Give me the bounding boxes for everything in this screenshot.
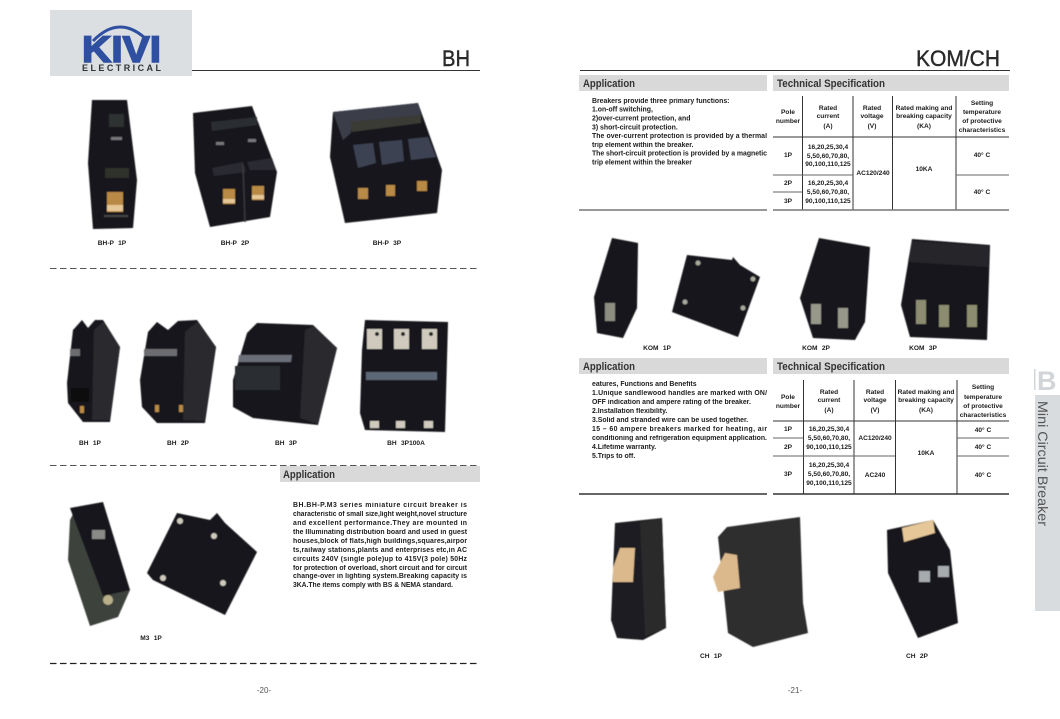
panel: CH technical specification: Rated making and <box>898 389 954 396</box>
caption: BH 3P100A: BH 3P100A <box>387 440 425 447</box>
panel: KOM application: 3) short-circuit protection. <box>592 124 678 132</box>
panel: KOM technical specification: number <box>776 118 801 125</box>
panel: KOM technical specification: (V) <box>868 123 876 130</box>
panel: KOM technical specification: Technical Specification <box>777 78 885 90</box>
panel: KOM application: The over-current protection is provided by a thermal <box>592 133 767 140</box>
panel: KOM technical specification: AC120/240 <box>856 170 890 177</box>
product: BH-P 1P <box>88 100 137 229</box>
panel: BH application: 3KA.The items comply with BS & NEMA standard. <box>293 582 453 589</box>
panel: CH technical specification: 40° C <box>975 443 992 451</box>
side tab: Mini Circuit Breaker: B <box>1037 366 1056 396</box>
panel: BH application: circuits 240V (single pole)up to 415V(3 pole) 50Hz <box>293 556 468 563</box>
panel: KOM technical specification <box>773 75 1009 210</box>
panel: KOM/CH application: 3.Solid and stranded wire can be used together. <box>592 417 748 424</box>
panel: KOM technical specification: 10KA <box>916 166 933 173</box>
panel: CH technical specification <box>773 358 1009 494</box>
caption: M3 1P: M3 1P <box>140 635 162 642</box>
product: CH 1P side <box>713 517 808 647</box>
panel: CH technical specification: voltage <box>863 397 887 404</box>
side tab: Mini Circuit Breaker: Mini Circuit Breaker <box>1035 401 1051 526</box>
panel: KOM technical specification: Rated <box>863 105 881 112</box>
panel: KOM technical specification: 5,50,60,70,80, <box>807 153 849 160</box>
panel: KOM application: Application <box>583 78 635 90</box>
logo: KIVI Electrical: KIVI <box>82 29 161 70</box>
panel: CH technical specification: Setting <box>972 384 994 391</box>
panel: CH technical specification: (A) <box>824 407 834 414</box>
panel: CH technical specification: of protective <box>963 403 1003 410</box>
panel: KOM/CH application: 2.Installation flexibility. <box>592 408 667 415</box>
panel: KOM technical specification: 2P <box>784 180 793 187</box>
panel: BH application: BH.BH-P.M3 series miniature circuit breaker is <box>293 502 467 509</box>
panel: KOM/CH application: OFF indication and ampere rating of the breaker. <box>592 399 751 406</box>
logo: KIVI Electrical: ELECTRICAL <box>82 63 162 73</box>
side tab: Mini Circuit Breaker <box>1034 366 1060 611</box>
panel: BH application: Application <box>283 469 335 481</box>
panel: CH technical specification: Technical Specification <box>777 361 885 373</box>
panel: CH technical specification: Rated <box>820 389 838 396</box>
panel: CH technical specification: (KA) <box>919 407 933 414</box>
panel: CH technical specification: 3P <box>784 471 793 478</box>
panel: BH application: the Illuminating distribution board and used in guest <box>293 529 468 536</box>
panel: BH application <box>280 466 480 589</box>
panel: KOM technical specification: Pole <box>781 109 795 116</box>
panel: KOM/CH application: 15 – 60 ampere breakers marked for heating, air <box>592 426 767 433</box>
panel: KOM technical specification: 16,20,25,30,4 <box>808 144 848 151</box>
panel: CH technical specification: (V) <box>871 407 879 414</box>
panel: CH technical specification: breaking capacity <box>898 397 954 404</box>
panel: CH technical specification: 90,100,110,125 <box>806 480 852 487</box>
panel: CH technical specification: 40° C <box>975 426 992 434</box>
product: BH 2P <box>140 320 216 423</box>
panel: KOM technical specification: 90,100,110,125 <box>805 198 851 205</box>
product: CH 1P front <box>611 518 666 640</box>
caption: KOM 3P: KOM 3P <box>909 345 937 352</box>
panel: KOM technical specification: 5,50,60,70,80, <box>807 189 849 196</box>
panel: CH technical specification: characteristics <box>960 412 1007 419</box>
panel: CH technical specification: Pole <box>781 394 795 401</box>
panel: KOM technical specification: 1P <box>784 152 793 159</box>
panel: CH technical specification: 1P <box>784 426 793 433</box>
caption: BH 3P: BH 3P <box>275 440 298 447</box>
panel: CH technical specification: temperature <box>964 394 1002 401</box>
product: BH-P 2P <box>193 106 277 227</box>
panel: KOM/CH application: eatures, Functions and Benefits <box>592 381 697 388</box>
panel: KOM technical specification: voltage <box>860 113 884 120</box>
panel: KOM application: Breakers provide three primary functions: <box>592 98 729 105</box>
panel: KOM technical specification: (KA) <box>917 123 931 130</box>
panel: CH technical specification: AC120/240 <box>858 435 892 442</box>
panel: KOM application: trip element within the breaker. <box>592 142 694 149</box>
panel: BH application: for protection of overload, short circuit and for circuit <box>293 565 468 572</box>
panel: KOM application: 2)over-current protection, and <box>592 116 690 122</box>
product: CH 2P <box>887 520 958 638</box>
panel: KOM technical specification: 16,20,25,30,4 <box>808 180 848 187</box>
caption: BH-P 1P: BH-P 1P <box>98 240 127 247</box>
panel: KOM application <box>579 75 767 210</box>
panel: KOM technical specification: temperature <box>963 109 1001 116</box>
product: KOM 2P <box>800 238 870 340</box>
panel: KOM technical specification: Rated <box>819 105 837 112</box>
panel: CH technical specification: Rated <box>866 389 884 396</box>
page number: 21: -21- <box>788 686 802 695</box>
panel: KOM/CH application: 4.Lifetime warranty. <box>592 444 656 451</box>
panel: KOM application: The short-circuit protection is provided by a magnetic <box>592 150 767 158</box>
panel: CH technical specification: number <box>776 403 801 410</box>
product: BH-P 3P <box>330 103 442 223</box>
panel: BH application: and excellent performance.They are mounted in <box>293 520 467 527</box>
panel: CH technical specification: 10KA <box>918 450 935 457</box>
panel: KOM technical specification: 90,100,110,125 <box>805 161 851 168</box>
panel: KOM technical specification: current <box>817 113 840 120</box>
panel: KOM technical specification: characteristics <box>959 127 1006 134</box>
panel: KOM technical specification: Rated making and <box>896 105 952 112</box>
logo: KIVI Electrical <box>50 10 192 76</box>
product: BH 1P <box>67 320 120 422</box>
panel: KOM/CH application: Application <box>583 361 635 373</box>
panel: CH technical specification: current <box>818 397 841 404</box>
caption: BH-P 3P: BH-P 3P <box>373 240 402 247</box>
panel: KOM application: trip element within the breaker <box>592 160 692 166</box>
caption: KOM 2P: KOM 2P <box>802 345 830 352</box>
panel: CH technical specification: 5,50,60,70,80, <box>808 471 850 478</box>
product: M3 1P <box>68 502 257 626</box>
panel: KOM technical specification: (A) <box>823 123 833 130</box>
caption: BH 2P: BH 2P <box>167 440 190 447</box>
caption: CH 1P: CH 1P <box>700 653 723 660</box>
panel: KOM technical specification: of protective <box>962 118 1002 125</box>
panel: BH application: ts,railway stations,plants and enterprises etc,in AC <box>293 547 467 554</box>
caption: BH-P 2P: BH-P 2P <box>221 240 250 247</box>
heading: KOM/CH: KOM/CH <box>916 46 1000 71</box>
caption: BH 1P: BH 1P <box>79 440 102 447</box>
panel: KOM/CH application <box>579 358 767 494</box>
panel: CH technical specification: 90,100,110,125 <box>806 444 852 451</box>
panel: CH technical specification: AC240 <box>865 472 886 479</box>
panel: KOM/CH application: conditioning and refrigeration equipment application. <box>592 435 767 442</box>
caption: CH 2P: CH 2P <box>906 653 929 660</box>
panel: BH application: houses,block of flats,high buildings,squares,airpor <box>293 538 467 545</box>
product: KOM 1P <box>594 238 760 338</box>
panel: BH application: change-over in lighting system.Breaking capacity is <box>293 573 467 580</box>
panel: CH technical specification: 40° C <box>975 471 992 479</box>
panel: KOM application: 1.on-off switching, <box>592 106 653 114</box>
panel: KOM/CH application: 1.Unique sandlewood handles are marked with ON/ <box>592 390 767 397</box>
panel: KOM technical specification: 3P <box>784 198 793 205</box>
panel: KOM technical specification: 40° C <box>974 188 991 196</box>
panel: KOM technical specification: Setting <box>971 100 993 107</box>
panel: KOM technical specification: 40° C <box>974 151 991 159</box>
product: BH 3P100A <box>360 320 448 432</box>
product: KOM 3P <box>901 239 990 340</box>
panel: CH technical specification: 16,20,25,30,4 <box>809 426 849 433</box>
panel: CH technical specification: 2P <box>784 444 793 451</box>
caption: KOM 1P: KOM 1P <box>643 345 671 352</box>
page number: 20: -20- <box>257 686 271 695</box>
panel: CH technical specification: 5,50,60,70,80, <box>808 435 850 442</box>
panel: CH technical specification: 16,20,25,30,4 <box>809 462 849 469</box>
panel: KOM/CH application: 5.Trips to off. <box>592 453 635 460</box>
panel: BH application: characteristic of small size,light weight,novel structure <box>293 511 467 518</box>
product: BH 3P <box>233 323 337 425</box>
panel: KOM technical specification: breaking capacity <box>896 113 952 120</box>
heading: BH: BH <box>442 46 470 71</box>
